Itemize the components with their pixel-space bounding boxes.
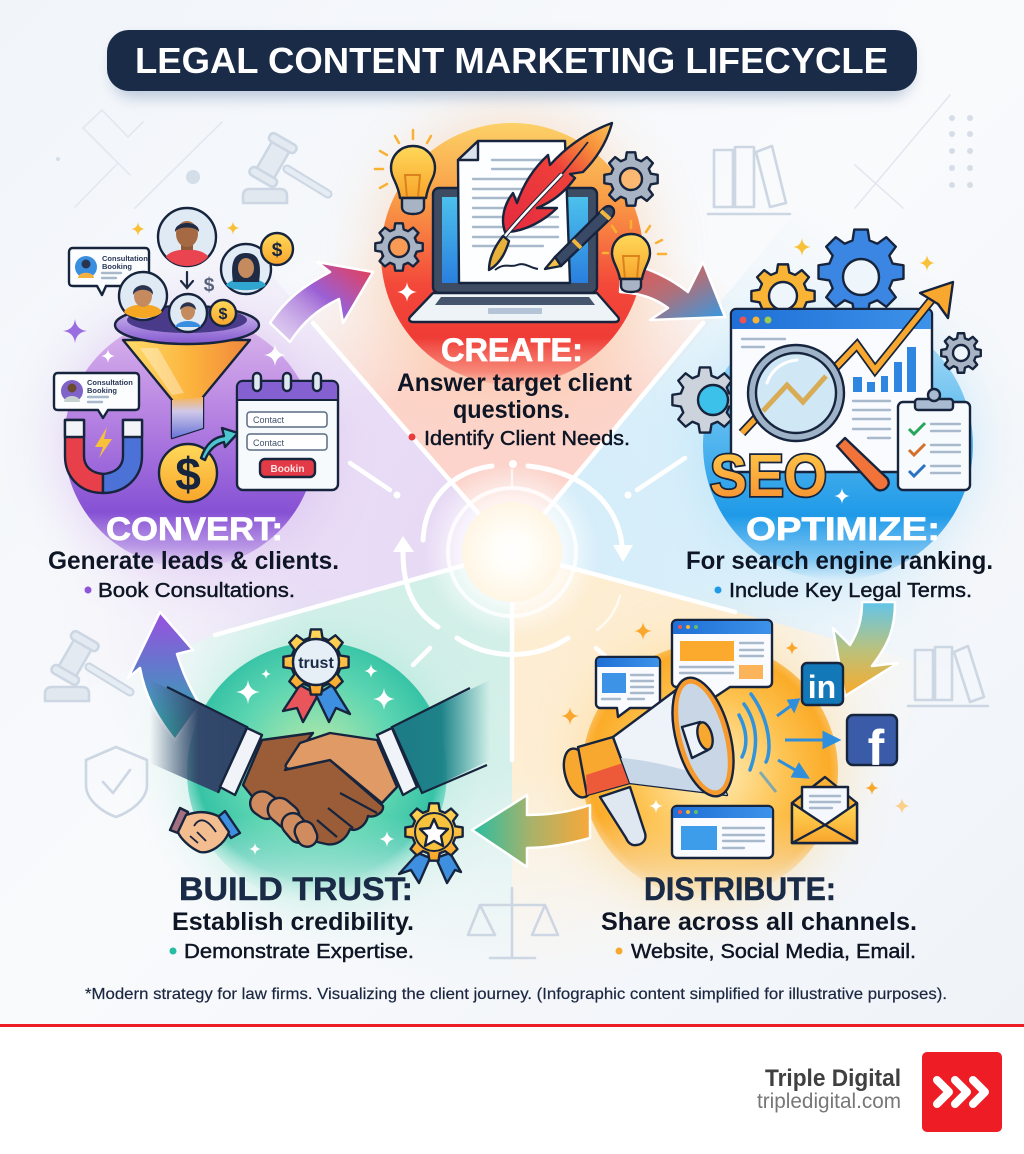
heading block: optimize	[686, 511, 993, 602]
icon: quill	[489, 123, 612, 270]
footer brand text: Triple Digital	[765, 1065, 901, 1092]
icon: gear grey small	[941, 333, 981, 373]
heading block: distribute	[601, 871, 917, 963]
footer bar	[0, 1024, 1024, 1154]
arrow: distribute to build trust	[472, 795, 590, 867]
heading block: build trust: Demonstrate Expertise.	[184, 941, 414, 963]
icon: avatar right with coin: $	[272, 240, 283, 261]
icon: avatars in funnel: $	[219, 306, 228, 323]
icon: sparkle	[397, 282, 417, 302]
icon: gear right	[604, 152, 658, 206]
panel: create circle	[381, 123, 643, 385]
icon group: convert funnel, avatars, calendar, magnet	[54, 208, 338, 502]
icon: booking bubble lower: Booking	[87, 386, 117, 395]
icon group: optimize browser, gears, magnifier, SEO	[672, 230, 981, 509]
panel: optimize circle	[703, 310, 973, 580]
icon: document	[458, 141, 570, 283]
heading block: create: Identify Client Needs.	[424, 428, 630, 450]
footer brand text	[757, 1065, 901, 1113]
icon: coin	[159, 444, 217, 502]
heading block: optimize: Include Key Legal Terms.	[729, 580, 972, 602]
heading block: build trust: Establish credibility.	[172, 908, 414, 936]
title	[107, 30, 917, 98]
icon: avatar right with coin	[221, 233, 293, 294]
icon: funnel	[115, 306, 259, 438]
icon: light bulb right	[603, 221, 666, 292]
icon: browser left	[596, 657, 660, 717]
icon: booking bubble lower: Consultation	[87, 378, 133, 387]
heading block: optimize: OPTIMIZE:	[746, 511, 940, 547]
icon: booking bubble lower	[54, 373, 139, 418]
icon: magnifier	[748, 345, 889, 490]
icon: arrow and dollar: $	[204, 275, 215, 296]
heading block: create	[397, 332, 633, 450]
arrow: convert to create	[270, 262, 373, 342]
icon: small handshake	[170, 808, 240, 852]
heading block: create: Answer target client	[397, 369, 633, 397]
footer brand text: tripledigital.com	[757, 1090, 901, 1113]
icon: booking bubble top: Consultation	[102, 254, 148, 263]
icon: teal arrow	[201, 428, 238, 460]
arrow: build trust to convert	[128, 612, 200, 740]
heading block: distribute: Website, Social Media, Email.	[631, 941, 916, 963]
icon: browser bottom	[672, 806, 773, 858]
icon: star badge	[399, 803, 463, 883]
icon: handshake	[243, 733, 397, 850]
icon: calendar form: Contact	[253, 438, 285, 448]
icon: growth arrow	[742, 282, 953, 433]
heading block: distribute: Share across all channels.	[601, 908, 917, 936]
icon: checklist clipboard	[898, 389, 970, 490]
icon group: create laptop, document, quill	[375, 123, 666, 322]
icon: right sleeve	[377, 680, 490, 795]
icon: booking bubble top: Booking	[102, 262, 132, 271]
heading block: create: questions.	[453, 396, 570, 424]
icon: browser top	[672, 620, 772, 697]
heading block: distribute: DISTRIBUTE:	[644, 871, 836, 907]
footnote: *Modern strategy for law firms. Visualizing the client journey. (Infographic content simplified for illustrative purposes).	[85, 986, 947, 1003]
icon: sparkles	[793, 238, 935, 504]
panel: convert circle	[64, 316, 316, 568]
centre hub with radiating lines	[215, 323, 735, 760]
icon: gear left	[375, 223, 423, 271]
icon: gear blue	[819, 230, 903, 314]
icon: laptop	[409, 188, 619, 322]
icon: trust ribbon badge: trust	[298, 655, 334, 672]
icon: calendar form: Bookin	[271, 464, 304, 475]
icon: avatars in funnel	[119, 272, 236, 332]
heading block: convert: Book Consultations.	[98, 580, 295, 602]
icon: linkedin: in	[808, 669, 836, 705]
heading block: convert: CONVERT:	[106, 511, 283, 547]
icon: sparkles	[63, 222, 286, 366]
icon group: distribute megaphone and channels	[559, 620, 910, 858]
heading block: convert: Generate leads & clients.	[48, 547, 339, 575]
logo: triple chevron	[922, 1052, 1002, 1132]
faint decorative law icons	[45, 95, 988, 958]
icon: channel arrows	[760, 700, 838, 792]
heading block: build trust: BUILD TRUST:	[179, 871, 413, 907]
heading block: create: CREATE:	[441, 332, 583, 368]
icon: sound waves	[739, 694, 769, 770]
icon: coin: $	[175, 448, 201, 500]
arrow: optimize to distribute	[833, 602, 898, 696]
icon: browser window	[731, 309, 932, 472]
heading block: convert	[48, 511, 339, 602]
panel: build trust circle	[187, 642, 447, 902]
icon: calendar form	[237, 373, 338, 490]
panel: distribute circle	[582, 643, 838, 899]
icon: pen	[545, 206, 614, 269]
icon: booking bubble top	[69, 248, 149, 295]
icon: megaphone	[559, 671, 745, 845]
icon: linkedin	[802, 663, 843, 705]
icon: gear grey large	[672, 367, 738, 433]
heading block: optimize: For search engine ranking.	[686, 547, 993, 575]
icon group: build trust handshake and badges	[150, 629, 490, 883]
icon: calendar form: Contact	[253, 415, 285, 425]
icon: left sleeve	[150, 680, 262, 795]
icon: SEO lettering: SEO	[710, 443, 827, 509]
icon: avatar top	[158, 208, 216, 266]
arrow: create to optimize	[620, 262, 725, 320]
icon: facebook	[847, 715, 897, 776]
icon: gear yellow	[751, 264, 815, 328]
title: LEGAL CONTENT MARKETING LIFECYCLE	[135, 40, 888, 81]
icon: light bulb left	[375, 130, 435, 214]
icon: magnet	[65, 420, 142, 493]
icon: sparkles	[236, 664, 395, 855]
icon: arrow and dollar	[181, 272, 215, 296]
icon: trust ribbon badge	[283, 629, 350, 722]
heading block: build trust	[170, 871, 414, 963]
icon: facebook: f	[868, 720, 885, 776]
icon: envelope	[792, 777, 857, 843]
icon: sparkles	[561, 622, 910, 814]
